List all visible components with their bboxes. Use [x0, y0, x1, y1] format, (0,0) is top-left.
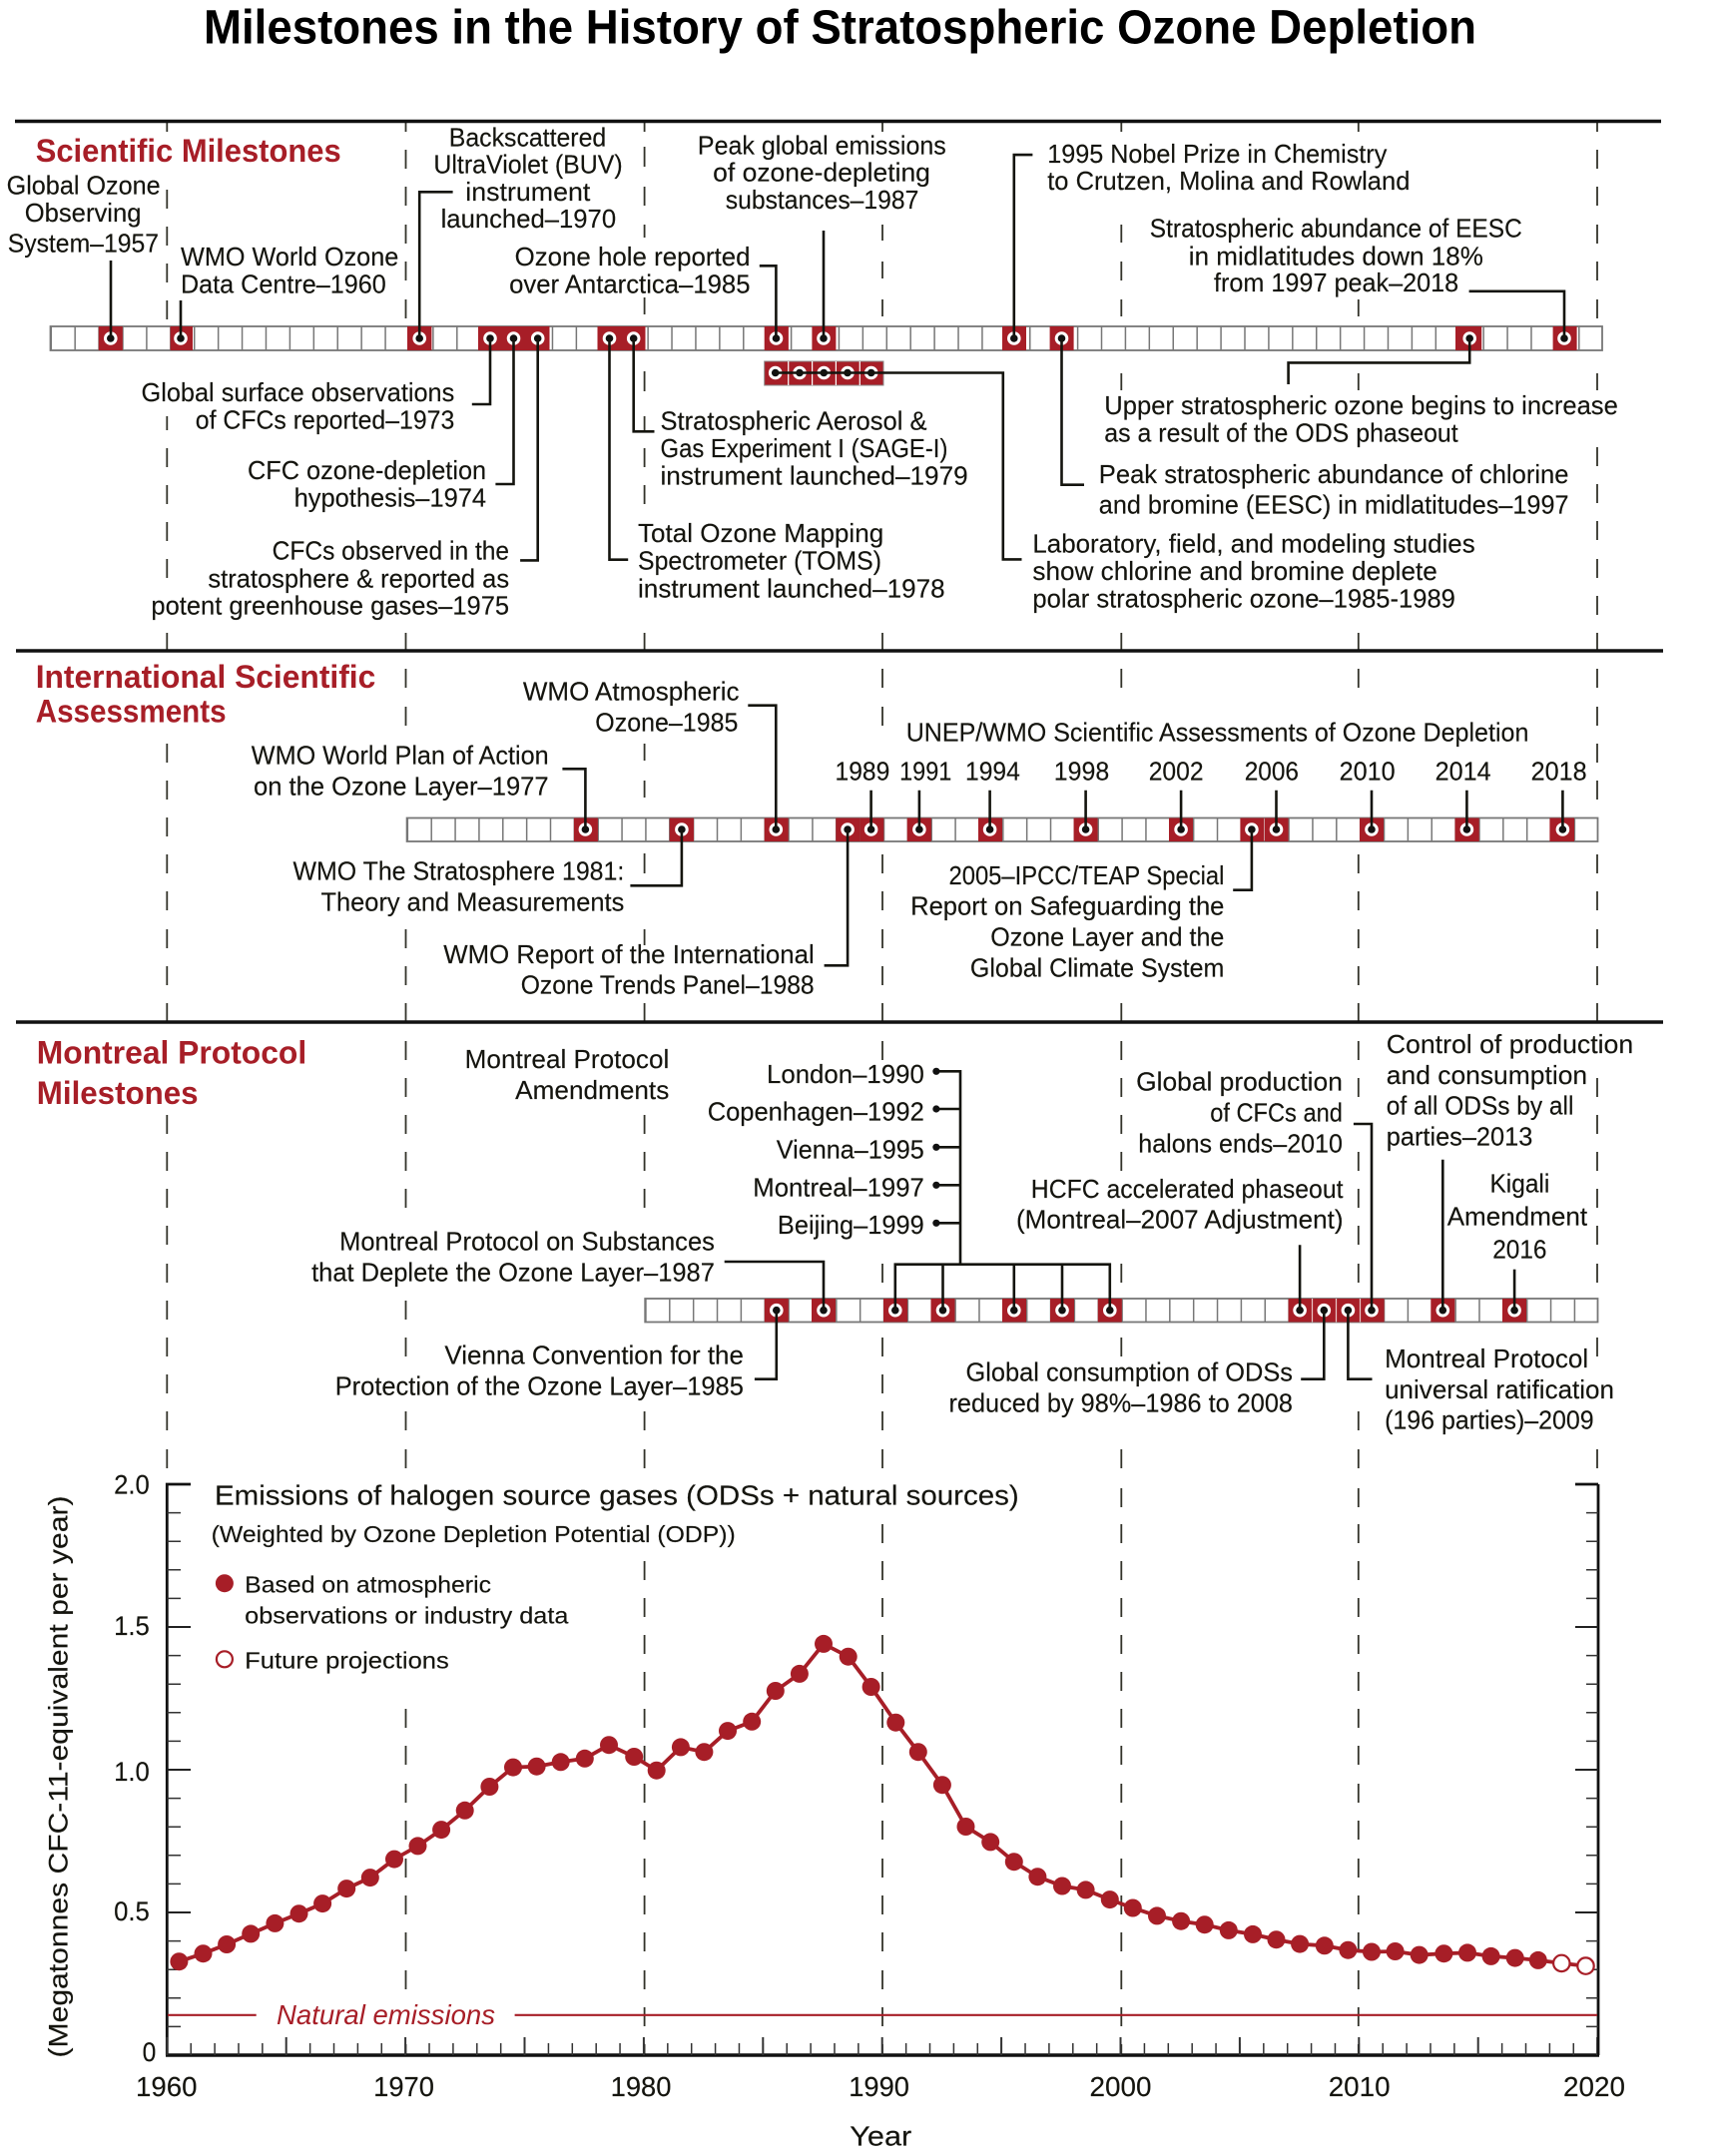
callout: global production of CFCs ends 2010: Global production	[1136, 1067, 1343, 1097]
chart axes and ticks	[166, 1484, 1599, 2055]
callout: Nobel Prize 1995	[1014, 139, 1410, 338]
chart subtitle: (Weighted by Ozone Depletion Potential (ODP))	[212, 1521, 736, 1547]
heading: scientific milestones: Scientific Milestones	[36, 133, 341, 169]
callout: CFCs observed in stratosphere 1975: stratosphere & reported as	[208, 563, 509, 593]
callout: laboratory field and modeling studies 1985-1989: Laboratory, field, and modeling studies	[1032, 529, 1475, 559]
callout: universal ratification 2009: Montreal Protocol	[1385, 1344, 1588, 1373]
chart title: Emissions of halogen source gases (ODSs + natural sources)	[215, 1479, 1019, 1511]
callout: WMO Atmospheric Ozone 1985	[523, 677, 776, 829]
callout: ozone hole 1985: Ozone hole reported	[515, 242, 751, 271]
callout: UNEP/WMO scientific assessments with years: 2006	[1245, 757, 1299, 787]
callout: Kigali Amendment 2016	[1447, 1168, 1588, 1311]
panel: emissions chart	[44, 1470, 1625, 2152]
callout: WMO World Plan of Action 1977: on the Ozone Layer–1977	[254, 772, 549, 802]
x-axis tick labels: 1970	[373, 2071, 434, 2102]
x-axis tick labels: 1990	[849, 2071, 909, 2102]
callout: Montreal Protocol on Substances 1987: Montreal Protocol on Substances	[339, 1227, 715, 1257]
callout: WMO Ozone Trends Panel 1988: WMO Report of the International	[443, 939, 815, 969]
callout: Nobel Prize 1995: 1995 Nobel Prize in Chemistry	[1047, 139, 1387, 169]
callout: WMO The Stratosphere 1981	[293, 829, 682, 916]
callout: CFCs observed in stratosphere 1975	[151, 338, 538, 621]
callout: CFC ozone-depletion hypothesis 1974: hypothesis–1974	[294, 482, 486, 512]
legend	[216, 1571, 569, 1673]
callout: laboratory field and modeling studies 1985-1989: show chlorine and bromine deplete	[1032, 556, 1437, 586]
callout: WMO World Plan of Action 1977: WMO World Plan of Action	[252, 741, 549, 771]
callout: WMO World Plan of Action 1977	[252, 741, 585, 829]
callout: global consumption of ODSs reduced 98 percent: Global consumption of ODSs	[966, 1356, 1293, 1386]
callout: global surface observations 1973	[142, 338, 490, 435]
y-axis title: (Megatonnes CFC-11-equivalent per year)	[44, 1495, 74, 2058]
callout: IPCC/TEAP special report 2005: Report on Safeguarding the	[910, 891, 1224, 921]
heading: montreal protocol milestones	[37, 1035, 306, 1111]
heading: montreal protocol milestones: Montreal Protocol	[37, 1035, 306, 1071]
callout: peak EESC 1997: and bromine (EESC) in midlatitudes–1997	[1099, 489, 1569, 519]
callout: UNEP/WMO scientific assessments with years: 2002	[1149, 757, 1204, 787]
callout: SAGE-I 1979: Stratospheric Aerosol &	[661, 406, 927, 436]
callout: WMO Atmospheric Ozone 1985: WMO Atmospheric	[523, 677, 739, 707]
callout: WMO Ozone Trends Panel 1988	[443, 829, 848, 1000]
callout: TOMS 1978: Spectrometer (TOMS)	[638, 546, 881, 576]
callout: HCFC accelerated phaseout 2007: (Montreal–2007 Adjustment)	[1016, 1205, 1344, 1235]
panel: international scientific assessments	[36, 659, 1598, 1000]
callout: TOMS 1978: Total Ozone Mapping	[638, 518, 883, 548]
callout: global production of CFCs ends 2010: of CFCs and	[1210, 1097, 1343, 1127]
y-axis tick labels: 0.5	[114, 1896, 150, 1926]
callout: ozone hole 1985: over Antarctica–1985	[509, 270, 751, 299]
callout: IPCC/TEAP special report 2005: 2005–IPCC/TEAP Special	[948, 860, 1224, 890]
callout: universal ratification 2009	[1348, 1311, 1614, 1435]
callout: IPCC/TEAP special report 2005: Ozone Layer and the	[990, 922, 1224, 952]
y-axis tick labels: 2.0	[114, 1470, 150, 1500]
callout: Montreal Protocol amendments	[465, 1044, 1110, 1311]
legend: Future projections	[245, 1647, 449, 1673]
callout: universal ratification 2009: (196 parties)–2009	[1385, 1405, 1594, 1435]
panel: montreal protocol milestones	[37, 1029, 1633, 1435]
callout: UNEP/WMO scientific assessments with years: 1991	[899, 757, 951, 787]
callout: WMO World Ozone Data Centre 1960: WMO World Ozone	[181, 242, 398, 271]
callout: UNEP/WMO scientific assessments with years: UNEP/WMO Scientific Assessments of Ozone Depletion	[906, 717, 1528, 747]
x-axis tick labels: 1960	[136, 2071, 198, 2102]
heading: international scientific assessments	[36, 659, 375, 729]
y-axis tick labels	[114, 1470, 156, 2067]
y-axis tick labels: 1.0	[114, 1757, 150, 1787]
heading: international scientific assessments: Assessments	[36, 693, 227, 729]
line chart: halogen source gas emissions	[170, 1635, 1594, 1974]
callout: WMO The Stratosphere 1981: WMO The Stratosphere 1981:	[293, 856, 624, 886]
timeline: assessments 1970 to 2019	[407, 818, 1598, 841]
callout: laboratory field and modeling studies 1985-1989	[776, 373, 1475, 614]
x-axis tick labels: 1980	[611, 2071, 671, 2102]
timeline: laboratory studies 1985 to 1989	[765, 361, 883, 385]
callout: EESC down 18 percent 2018: in midlatitudes down 18%	[1189, 241, 1483, 270]
natural emissions line: Natural emissions	[277, 1999, 495, 2030]
callout: HCFC accelerated phaseout 2007	[1016, 1174, 1344, 1311]
callout: ozone hole 1985	[509, 242, 776, 338]
callout: global production of CFCs ends 2010	[1136, 1067, 1372, 1311]
y-axis tick labels: 1.5	[114, 1611, 150, 1641]
legend: observations or industry data	[245, 1603, 569, 1629]
callout: Montreal Protocol on Substances 1987	[311, 1227, 824, 1311]
callout: Montreal Protocol amendments: Montreal–1997	[753, 1172, 924, 1202]
callout: global consumption of ODSs reduced 98 percent	[948, 1311, 1324, 1417]
callout: SAGE-I 1979: instrument launched–1979	[661, 461, 968, 491]
x-axis tick labels	[136, 2071, 1625, 2102]
callout: Kigali Amendment 2016: Amendment	[1447, 1202, 1588, 1232]
callout: CFC ozone-depletion hypothesis 1974	[248, 338, 513, 512]
callout: BUV instrument 1970	[419, 122, 623, 338]
callout: global production of CFCs ends 2010: halons ends–2010	[1138, 1128, 1343, 1158]
callout: laboratory field and modeling studies 1985-1989: polar stratospheric ozone–1985-1989	[1032, 584, 1455, 614]
timeline: scientific milestones 1955 to 2019	[50, 326, 1602, 350]
callout: UNEP/WMO scientific assessments with years: 2010	[1340, 757, 1396, 787]
callout: peak global emissions 1987: of ozone-depleting	[713, 158, 930, 188]
callout: upper stratospheric ozone increase 2014: as a result of the ODS phaseout	[1104, 418, 1458, 448]
callout: Global Ozone Observing System 1957: System–1957	[8, 228, 159, 258]
callout: control of production 2013	[1387, 1029, 1633, 1311]
callout: EESC down 18 percent 2018: from 1997 peak–2018	[1214, 268, 1458, 297]
callout: SAGE-I 1979	[634, 338, 968, 491]
callout: UNEP/WMO scientific assessments with years: 1989	[835, 757, 889, 787]
callout: UNEP/WMO scientific assessments with years: 1998	[1054, 757, 1109, 787]
callout: Vienna Convention 1985	[335, 1311, 777, 1401]
callout: Montreal Protocol on Substances 1987: that Deplete the Ozone Layer–1987	[311, 1257, 715, 1287]
callout: CFCs observed in stratosphere 1975: potent greenhouse gases–1975	[151, 591, 509, 621]
callout: TOMS 1978: instrument launched–1978	[638, 573, 945, 603]
callout: peak global emissions 1987: substances–1987	[726, 185, 918, 215]
callout: UNEP/WMO scientific assessments with years: 2018	[1531, 757, 1587, 787]
callout: upper stratospheric ozone increase 2014: Upper stratospheric ozone begins to increase	[1104, 390, 1618, 420]
callout: peak global emissions 1987: Peak global emissions	[698, 130, 946, 160]
callout: control of production 2013: parties–2013	[1387, 1122, 1532, 1152]
heading: international scientific assessments: International Scientific	[36, 659, 375, 695]
callout: WMO Atmospheric Ozone 1985: Ozone–1985	[595, 707, 738, 737]
callout: Global Ozone Observing System 1957: Global Ozone	[7, 171, 161, 201]
callout: Kigali Amendment 2016: 2016	[1492, 1235, 1547, 1265]
y-axis tick labels: 0	[143, 2037, 156, 2067]
callout: control of production 2013: of all ODSs by all	[1387, 1091, 1573, 1121]
callout: Global Ozone Observing System 1957	[7, 171, 161, 338]
callout: global surface observations 1973: of CFCs reported–1973	[196, 405, 454, 435]
heading: montreal protocol milestones: Milestones	[37, 1075, 199, 1111]
callout: Nobel Prize 1995: to Crutzen, Molina and Rowland	[1047, 166, 1410, 196]
callout: peak global emissions 1987	[698, 130, 946, 338]
callout: SAGE-I 1979: Gas Experiment I (SAGE-I)	[661, 433, 947, 463]
title: Milestones in the History of Stratospheric Ozone Depletion	[204, 0, 1476, 54]
callout: global consumption of ODSs reduced 98 percent: reduced by 98%–1986 to 2008	[948, 1387, 1293, 1417]
callout: UNEP/WMO scientific assessments with years: 2014	[1435, 757, 1491, 787]
callout: Montreal Protocol amendments: Copenhagen–1992	[708, 1097, 924, 1127]
callout: WMO Ozone Trends Panel 1988: Ozone Trends Panel–1988	[521, 970, 815, 1000]
callout: BUV instrument 1970: Backscattered	[449, 122, 606, 152]
callout: UNEP/WMO scientific assessments with years	[835, 717, 1587, 829]
callout: Vienna Convention 1985: Vienna Convention for the	[444, 1341, 744, 1370]
callout: Vienna Convention 1985: Protection of the Ozone Layer–1985	[335, 1371, 744, 1401]
timeline: montreal protocol 1980 to 2019	[645, 1299, 1597, 1322]
callout: Global Ozone Observing System 1957: Observing	[25, 198, 142, 228]
x-axis tick labels: 2010	[1329, 2071, 1391, 2102]
callout: IPCC/TEAP special report 2005: Global Climate System	[970, 952, 1224, 982]
x-axis title: Year	[850, 2120, 911, 2152]
callout: EESC down 18 percent 2018: Stratospheric abundance of EESC	[1150, 214, 1522, 244]
legend: Based on atmospheric	[245, 1571, 491, 1597]
callout: control of production 2013: and consumption	[1387, 1060, 1587, 1090]
x-axis tick labels: 2020	[1563, 2071, 1625, 2102]
callout: BUV instrument 1970: instrument	[465, 177, 591, 207]
callout: Montreal Protocol amendments: Vienna–1995	[777, 1135, 924, 1165]
callout: control of production 2013: Control of production	[1387, 1029, 1633, 1059]
callout: WMO The Stratosphere 1981: Theory and Measurements	[321, 886, 624, 916]
callout: universal ratification 2009: universal ratification	[1385, 1374, 1614, 1404]
callout: peak EESC 1997: Peak stratospheric abundance of chlorine	[1099, 459, 1569, 489]
callout: Montreal Protocol amendments: Beijing–1999	[778, 1210, 924, 1240]
callout: EESC down 18 percent 2018	[1150, 214, 1564, 338]
callout: BUV instrument 1970: UltraViolet (BUV)	[433, 149, 623, 179]
callout: Montreal Protocol amendments: Montreal Protocol	[465, 1044, 669, 1074]
callout: Kigali Amendment 2016: Kigali	[1489, 1168, 1549, 1198]
callout: global surface observations 1973: Global surface observations	[142, 377, 454, 407]
callout: WMO World Ozone Data Centre 1960	[181, 242, 398, 338]
callout: peak EESC 1997	[1062, 338, 1569, 519]
callout: HCFC accelerated phaseout 2007: HCFC accelerated phaseout	[1031, 1174, 1344, 1204]
callout: UNEP/WMO scientific assessments with years: 1994	[965, 757, 1020, 787]
x-axis tick labels: 2000	[1090, 2071, 1152, 2102]
callout: Montreal Protocol amendments: Amendments	[515, 1075, 669, 1105]
callout: TOMS 1978	[609, 338, 945, 603]
panel: scientific milestones	[7, 122, 1618, 621]
callout: CFCs observed in stratosphere 1975: CFCs observed in the	[273, 536, 509, 566]
callout: BUV instrument 1970: launched–1970	[441, 204, 616, 234]
callout: CFC ozone-depletion hypothesis 1974: CFC ozone-depletion	[248, 455, 486, 485]
callout: upper stratospheric ozone increase 2014	[1104, 338, 1618, 448]
callout: WMO World Ozone Data Centre 1960: Data Centre–1960	[181, 270, 386, 299]
callout: IPCC/TEAP special report 2005	[910, 829, 1252, 982]
callout: Montreal Protocol amendments: London–1990	[767, 1059, 924, 1089]
